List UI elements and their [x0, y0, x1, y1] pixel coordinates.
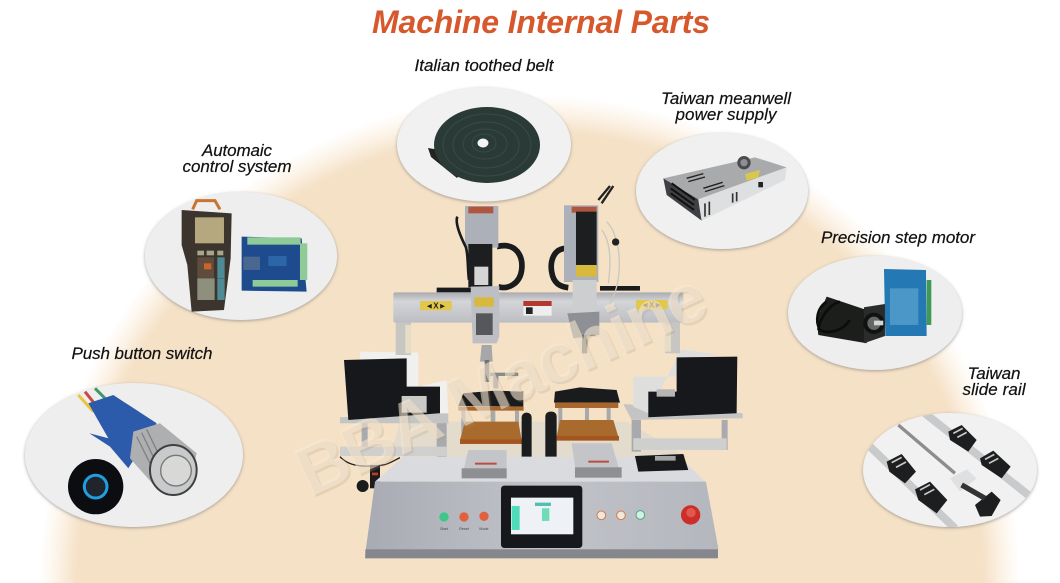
foot switch [357, 465, 380, 492]
panel: slide rail [863, 364, 1037, 528]
cable coils [437, 246, 640, 290]
left cable [340, 457, 400, 466]
ellipse: power supply [636, 133, 808, 249]
label: power supply: Taiwan meanwell [661, 89, 792, 108]
X axis label right [636, 300, 668, 309]
left indicator buttons [439, 512, 489, 531]
panel: power supply [636, 89, 808, 249]
icon: motor and driver [817, 269, 931, 343]
X axis label left: ◄X► [425, 301, 447, 310]
ellipse: step motor [788, 256, 962, 370]
gantry beam [393, 292, 683, 323]
left indicator buttons: Start [440, 527, 448, 531]
left screw head [457, 206, 499, 382]
ellipse: slide rail [863, 413, 1037, 527]
label: belt: Italian toothed belt [414, 56, 555, 75]
X axis label left [420, 301, 452, 310]
icon: metal push button with connector [68, 388, 197, 514]
panel: Italian toothed belt [397, 56, 571, 202]
right indicator buttons [597, 511, 645, 520]
top deck [375, 457, 705, 482]
icon: power supply unit [663, 156, 787, 221]
sliders [462, 443, 622, 478]
left jig [458, 373, 524, 444]
table back surface [390, 422, 687, 457]
black belts [522, 412, 557, 464]
label: power supply line 2: power supply [674, 105, 778, 124]
gantry posts [396, 322, 680, 355]
emergency stop [681, 505, 700, 525]
ellipse: push button [25, 383, 243, 527]
left indicator buttons: Reset [459, 527, 469, 531]
title: Machine Internal Parts [372, 4, 710, 40]
left indicator buttons: Mode [479, 527, 489, 531]
label: step motor: Precision step motor [821, 228, 976, 247]
panel: push button switch [25, 344, 243, 527]
black box [635, 454, 688, 472]
left feeder [344, 352, 448, 420]
panel: control system [145, 141, 337, 320]
label: slide rail line 1: Taiwan [968, 364, 1020, 383]
right jig [554, 387, 620, 441]
right screw head [564, 186, 619, 353]
icon: handheld controller and board [182, 201, 307, 312]
label: slide rail line 2: slide rail [962, 380, 1027, 399]
icon: rails and blocks [870, 413, 1028, 528]
label: control line 1: Automaic [201, 141, 272, 160]
warning label [523, 301, 552, 316]
label: push button: Push button switch [72, 344, 212, 363]
icon: belt coil [428, 107, 540, 183]
right feeder [633, 349, 737, 417]
X axis label right: ◄X► [641, 300, 662, 309]
touchscreen [501, 486, 582, 548]
ellipse: belt [397, 88, 571, 202]
ellipse: control system [145, 192, 337, 320]
right feeder stand [623, 404, 743, 452]
machine illustration [340, 186, 743, 558]
label: control line 2: control system [182, 157, 292, 176]
watermark: BBA Machine [284, 256, 718, 511]
machine base front [365, 482, 718, 558]
watermark shadow: BBA Machine [286, 258, 720, 513]
panel: step motor [788, 228, 976, 370]
left feeder stand [340, 413, 448, 457]
